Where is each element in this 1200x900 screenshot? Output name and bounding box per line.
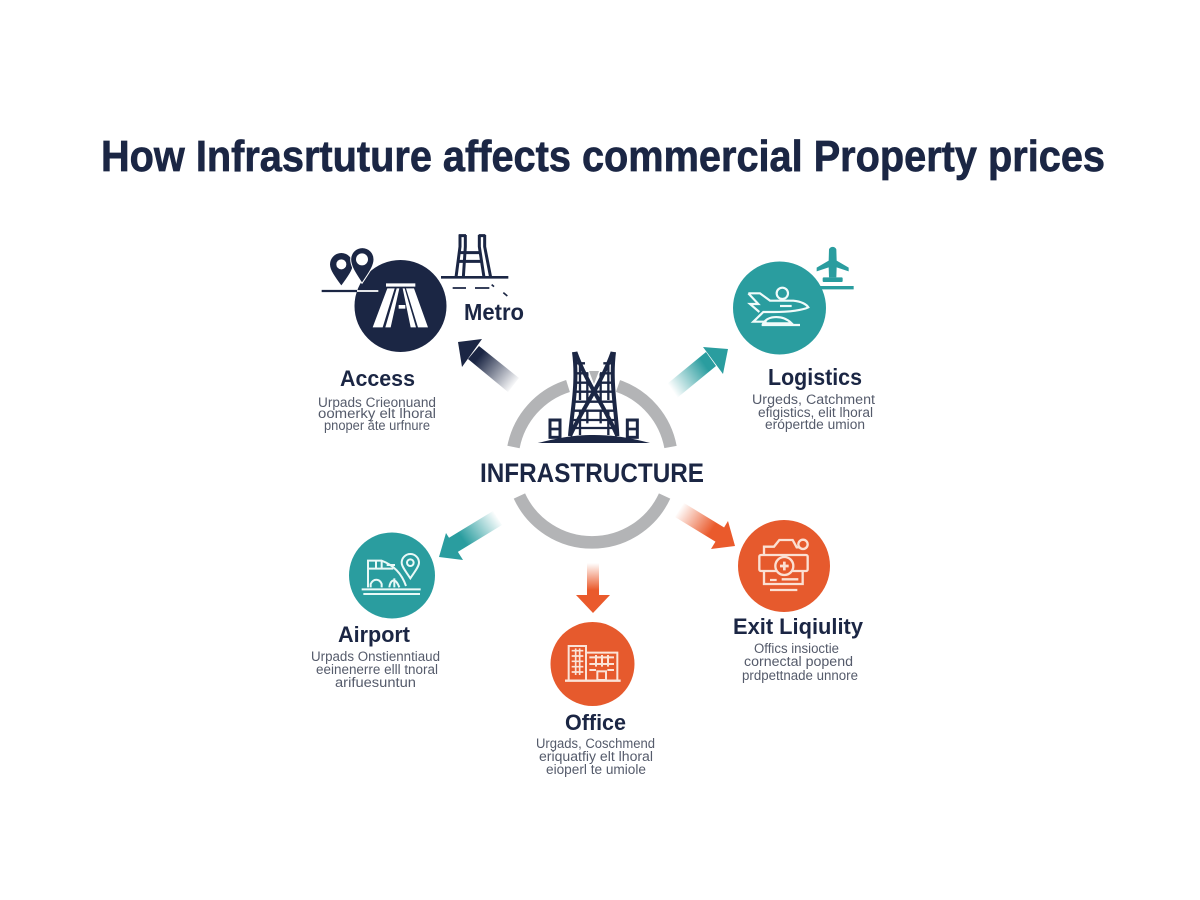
exit liquidity description: cornectal popend	[744, 654, 853, 669]
access description: Urpads Crieonuand	[318, 395, 436, 410]
access description: pnoper ăte urfnure	[324, 418, 430, 433]
access heading: Access	[340, 366, 415, 391]
office description	[536, 736, 655, 777]
airport description	[311, 649, 440, 690]
office heading: Office	[565, 710, 626, 735]
hub label: INFRASTRUCTURE	[480, 458, 704, 488]
icon: road	[373, 283, 428, 327]
metro label: Metro	[464, 299, 524, 325]
arrow: to airport	[439, 511, 502, 560]
logistics description: erópertde umion	[765, 417, 865, 432]
access description	[318, 395, 436, 433]
exit liquidity description: Offics insioctie	[754, 641, 839, 656]
icon: office buildings	[565, 646, 621, 681]
logistics description: efigistics, elit lhoral	[758, 405, 873, 420]
office description: eioperl te umiole	[546, 762, 646, 777]
icon: location pins	[322, 248, 378, 291]
access circle	[354, 260, 446, 352]
exit liquidity heading: Exit Liqiulity	[733, 614, 864, 639]
icon: camera safe	[759, 540, 808, 590]
access description: oomerky elt lhoral	[318, 406, 436, 421]
exit liquidity description: prdpettnade unnore	[742, 668, 858, 683]
node: logistics	[733, 247, 875, 432]
logistics description: Urgeds, Catchment	[752, 392, 875, 407]
hub: infrastructure	[480, 352, 704, 542]
node: exit liquidity	[733, 520, 864, 683]
airport heading: Airport	[338, 622, 411, 647]
node: office	[536, 622, 655, 777]
node: access	[318, 248, 446, 433]
exit liquidity description	[742, 641, 858, 683]
icon: metro bridge	[441, 235, 508, 296]
icon: terminal and pin	[362, 554, 421, 594]
arrow: to office	[576, 563, 610, 613]
airport circle	[349, 532, 435, 618]
logistics heading: Logistics	[768, 364, 862, 390]
office description: Urgads, Coschmend	[536, 736, 655, 751]
node: metro	[441, 235, 524, 325]
icon: aircraft	[748, 288, 808, 325]
hub ring	[514, 371, 670, 542]
airport description: Urpads Onstienntiaud	[311, 649, 440, 664]
arrow: to exit liquidity	[675, 503, 735, 549]
airport description: arifuesuntun	[335, 675, 416, 690]
exit liquidity circle	[738, 520, 830, 612]
office description: eriquatfiy elt lhoral	[539, 749, 653, 764]
arrow: to logistics	[667, 347, 728, 398]
arrow: to access	[458, 339, 519, 392]
logistics circle	[733, 262, 826, 354]
airport description: eeinenerre elll tnoral	[316, 662, 438, 677]
hub bridge icon	[538, 352, 650, 443]
title: How Infrasrtuture affects commercial Property prices	[101, 132, 1105, 181]
icon: plane on runway	[809, 247, 854, 289]
office circle	[550, 622, 634, 706]
logistics description	[752, 392, 875, 432]
node: airport	[311, 532, 440, 690]
